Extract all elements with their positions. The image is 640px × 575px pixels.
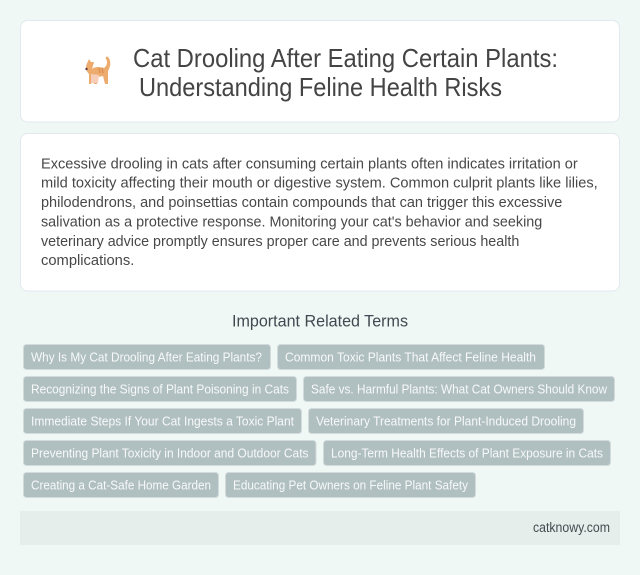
- paragraph text: salivation as a protective response. Monitoring your cat's behavior and seeking: [41, 213, 542, 230]
- tag 6: Veterinary Treatments for Plant-Induced Drooling: [316, 414, 576, 428]
- paragraph text: complications.: [41, 252, 134, 269]
- tag 8: [324, 440, 610, 466]
- title text: Cat Drooling After Eating Certain Plants:: [133, 43, 558, 73]
- tag 3: [24, 376, 296, 402]
- tag 8: Long-Term Health Effects of Plant Exposure in Cats: [331, 446, 603, 460]
- heading: related terms: Important Related Terms: [232, 312, 408, 330]
- tag 4: Safe vs. Harmful Plants: What Cat Owners Should Know: [311, 382, 608, 396]
- tag 7: [24, 440, 316, 466]
- tag 5: Immediate Steps If Your Cat Ingests a Toxic Plant: [31, 414, 294, 428]
- title text: [133, 43, 558, 102]
- tag 10: [226, 472, 476, 498]
- tag 9: Creating a Cat-Safe Home Garden: [31, 478, 211, 492]
- panel: summary paragraph: [20, 134, 620, 291]
- tag 9: [24, 472, 218, 498]
- paragraph text: mild toxicity affecting their mouth or digestive system. Common culprit plants like lilies,: [41, 174, 598, 192]
- tag 1: Why Is My Cat Drooling After Eating Plants?: [31, 350, 262, 364]
- tag 6: [308, 408, 584, 434]
- tag 4: [304, 376, 614, 402]
- tag 2: [278, 344, 544, 370]
- tag 7: Preventing Plant Toxicity in Indoor and Outdoor Cats: [31, 446, 309, 460]
- icon: cat: [85, 57, 110, 84]
- tag 2: Common Toxic Plants That Affect Feline Health: [285, 350, 536, 364]
- paragraph text: veterinary advice promptly ensures proper care and prevents serious health: [41, 233, 519, 250]
- title text: Understanding Feline Health Risks: [139, 72, 502, 102]
- paragraph text: Excessive drooling in cats after consuming certain plants often indicates irritation or: [41, 155, 578, 172]
- title card: [20, 20, 620, 122]
- tag 1: [24, 344, 270, 370]
- paragraph text: philodendrons, and poinsettias contain compounds that can trigger this excessive: [41, 194, 562, 211]
- tag 3: Recognizing the Signs of Plant Poisoning in Cats: [31, 382, 289, 396]
- tag 5: [24, 408, 302, 434]
- related term tags: [24, 344, 614, 498]
- paragraph text: [41, 155, 598, 269]
- footer: [20, 511, 620, 545]
- tag 10: Educating Pet Owners on Feline Plant Safety: [233, 478, 468, 492]
- footer site name: catknowy.com: [533, 520, 610, 535]
